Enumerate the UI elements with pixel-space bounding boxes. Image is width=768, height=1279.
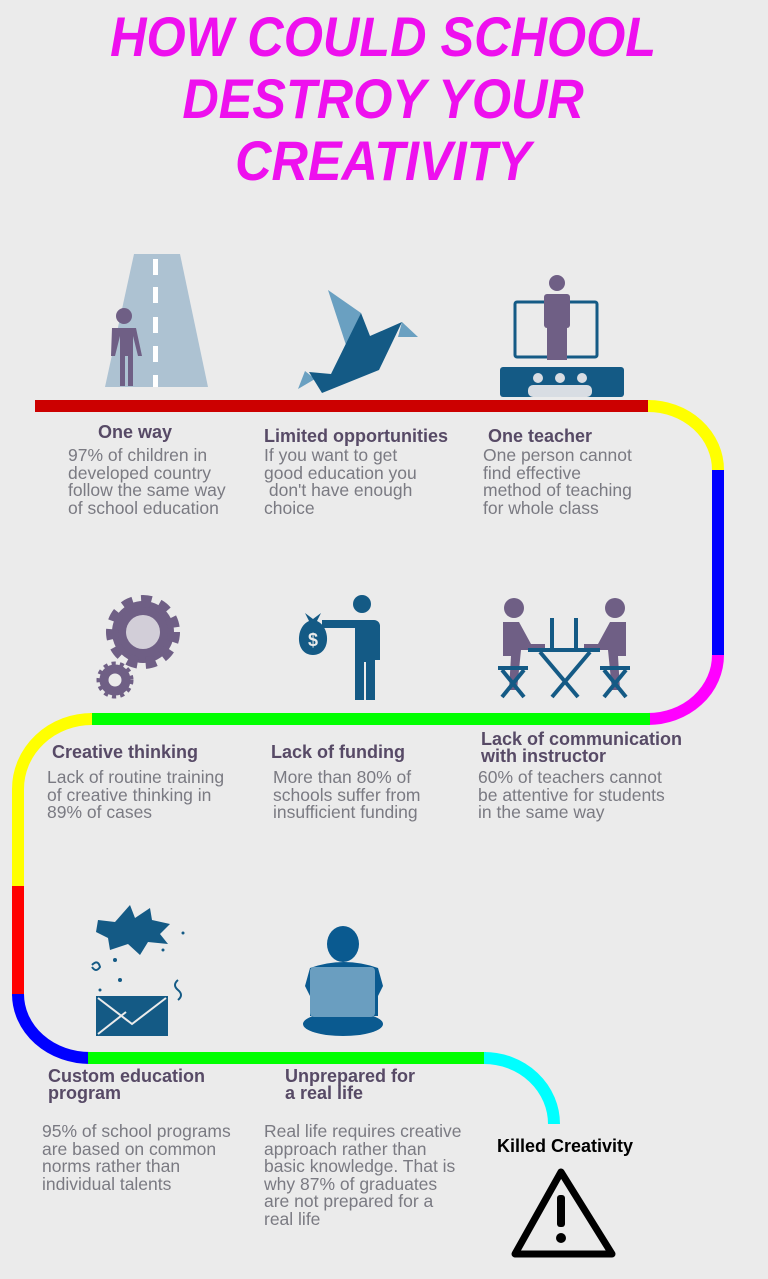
text: developed country <box>68 462 211 482</box>
item: creative thinking <box>47 742 224 822</box>
text: Limited opportunities <box>264 426 448 446</box>
text: 95% of school programs <box>42 1121 231 1141</box>
text: method of teaching <box>483 480 632 500</box>
text: don't have enough <box>269 480 412 500</box>
label: killed creativity: Killed Creativity <box>497 1136 633 1156</box>
text: Lack of routine training <box>47 767 224 787</box>
text: why 87% of graduates <box>264 1174 437 1194</box>
icon: teacher with board <box>500 275 624 397</box>
text: of school education <box>68 498 219 518</box>
icon: person with money bag <box>299 595 380 700</box>
text: Custom education <box>48 1066 205 1086</box>
text: norms rather than <box>42 1156 180 1176</box>
item: custom education program <box>42 1066 231 1194</box>
text: individual talents <box>42 1174 171 1194</box>
text: be attentive for students <box>478 784 665 804</box>
text: with instructor <box>481 746 606 766</box>
text: Lack of funding <box>271 742 405 762</box>
icon: person with laptop <box>303 926 383 1036</box>
text: are based on common <box>42 1138 216 1158</box>
item: one teacher <box>483 426 632 518</box>
title: DESTROY YOUR <box>182 67 584 130</box>
icon: person with money bag: $ <box>308 630 318 650</box>
text: 60% of teachers cannot <box>478 767 662 787</box>
title: HOW COULD SCHOOL <box>110 5 656 68</box>
text: One way <box>98 422 172 442</box>
icon: warning sign <box>515 1172 612 1254</box>
text: good education you <box>264 462 417 482</box>
text: basic knowledge. That is <box>264 1156 455 1176</box>
text: for whole class <box>483 498 599 518</box>
icon: envelope with burst <box>92 905 184 1036</box>
text: in the same way <box>478 802 604 822</box>
text: One teacher <box>488 426 592 446</box>
item: lack of communication <box>478 729 682 822</box>
icon: origami bird <box>298 290 418 393</box>
text: find effective <box>483 462 581 482</box>
item: limited opportunities <box>264 426 448 518</box>
text: 97% of children in <box>68 445 207 465</box>
text: Unprepared for <box>285 1066 415 1086</box>
text: One person cannot <box>483 445 632 465</box>
text: program <box>48 1083 121 1103</box>
text: Creative thinking <box>52 742 198 762</box>
text: choice <box>264 498 315 518</box>
text: follow the same way <box>68 480 226 500</box>
text: real life <box>264 1208 320 1228</box>
text: If you want to get <box>264 445 397 465</box>
item: lack of funding <box>271 742 421 822</box>
text: 89% of cases <box>47 802 152 822</box>
icon: two people at table <box>498 598 630 697</box>
icon: road with person <box>105 254 208 387</box>
text: Lack of communication <box>481 729 682 749</box>
text: are not prepared for a <box>264 1191 433 1211</box>
text: More than 80% of <box>273 767 411 787</box>
text: schools suffer from <box>273 784 421 804</box>
title: CREATIVITY <box>235 129 531 192</box>
item: unprepared <box>264 1066 461 1228</box>
icon: gears <box>99 601 174 696</box>
text: approach rather than <box>264 1138 426 1158</box>
text: insufficient funding <box>273 802 418 822</box>
text: of creative thinking in <box>47 784 211 804</box>
item: one way <box>68 422 226 518</box>
text: a real life <box>285 1083 363 1103</box>
title <box>110 5 656 192</box>
text: Real life requires creative <box>264 1121 461 1141</box>
timeline path <box>18 406 718 1124</box>
